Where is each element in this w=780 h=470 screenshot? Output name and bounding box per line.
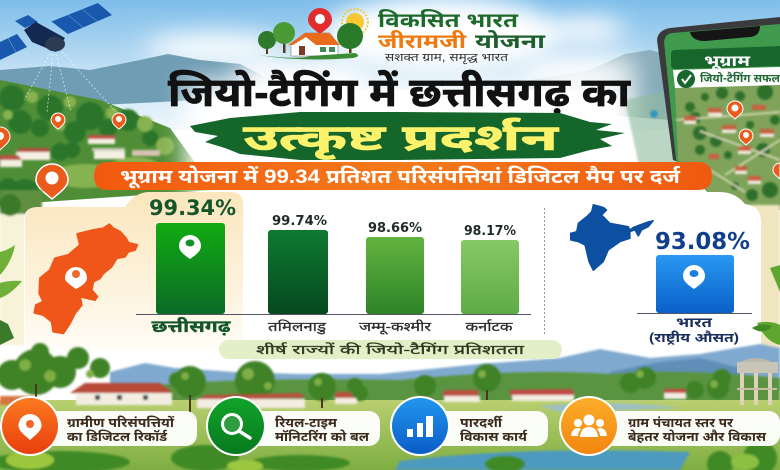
highlight panel behind Chhattisgarh — [25, 192, 243, 350]
left hillside with village — [0, 80, 215, 209]
foreground foliage — [0, 441, 777, 470]
bar: Chhattisgarh — [149, 196, 236, 336]
title line 2: उत्कृष्ट प्रदर्शन — [243, 117, 559, 161]
bottom landscape — [0, 343, 780, 470]
title line 1: जियो-टैगिंग में छत्तीसगढ़ का — [168, 69, 631, 115]
feature: real-time monitoring: मॉनिटरिंग को बल — [275, 429, 370, 444]
feature: real-time monitoring: रियल-टाइम — [275, 415, 338, 430]
bar: Karnataka — [461, 223, 519, 334]
phone map — [676, 84, 780, 201]
right leaves — [752, 265, 780, 345]
chart caption pill: शीर्ष राज्यों की जियो-टैगिंग प्रतिशतता — [256, 342, 525, 357]
mountains top right — [520, 50, 670, 120]
logo text: विकसित भारत — [378, 8, 519, 32]
bar: Tamil Nadu — [268, 213, 328, 335]
feature: transparent development: विकास कार्य — [460, 429, 528, 444]
main white panel — [24, 192, 761, 352]
chart caption pill — [219, 340, 562, 359]
phone with app screen: भूग्राम — [704, 53, 750, 71]
feature: transparent development — [390, 396, 548, 456]
bar: Chhattisgarh: 99.34% — [149, 196, 236, 220]
logo text: सशक्त ग्राम, समृद्ध भारत — [385, 52, 509, 64]
bar: Tamil Nadu: तमिलनाडु — [268, 319, 327, 335]
feature: digital record — [0, 396, 197, 456]
far mountains — [110, 344, 780, 390]
side backgrounds beside chart — [0, 190, 780, 350]
bar: Chhattisgarh: छत्तीसगढ़ — [152, 316, 231, 336]
feature: gram panchayat planning: ग्राम पंचायत स्तर पर — [628, 416, 734, 430]
satellite — [0, 3, 116, 112]
Chhattisgarh map — [34, 224, 137, 333]
logo text: जीरामजी — [378, 29, 467, 53]
pale valley beside phone — [625, 90, 685, 170]
water tower — [737, 358, 778, 405]
bar: Karnataka: कर्नाटक — [466, 319, 514, 334]
orange subtitle pill: भूग्राम योजना में 99.34 प्रतिशत परिसंपत्तियां डिजिटल मैप पर दर्ज — [120, 165, 681, 189]
bar: Jammu Kashmir — [359, 220, 432, 335]
left leaves — [0, 245, 22, 345]
white wash behind the title — [185, 56, 640, 197]
India map — [571, 205, 653, 270]
pond — [395, 450, 690, 470]
logo: house, trees, pin and sun — [258, 8, 368, 59]
phone with app screen — [657, 17, 780, 210]
map pins on hillside — [0, 113, 126, 199]
bar: Jammu Kashmir: जम्मू-कश्मीर — [359, 319, 432, 335]
village houses — [0, 383, 686, 408]
logo text: योजना — [475, 29, 546, 53]
tree highlights — [19, 359, 718, 390]
feature: digital record: का डिजिटल रिकॉर्ड — [67, 429, 168, 444]
bar chart: top states — [136, 196, 531, 336]
feature: digital record: ग्रामीण परिसंपत्तियों — [67, 415, 175, 430]
sky background — [0, 0, 780, 130]
logo text — [378, 8, 546, 64]
bar: India national average: 93.08% — [655, 229, 750, 255]
bar: Karnataka: 98.17% — [464, 223, 516, 239]
left village houses — [0, 135, 160, 167]
bar: India national average — [637, 229, 752, 345]
feature: real-time monitoring — [206, 396, 380, 456]
mountains top left — [0, 54, 300, 110]
tree line behind — [100, 372, 780, 410]
solid white behind the title — [225, 90, 615, 195]
clouds — [145, 0, 625, 73]
bar: India national average: (राष्ट्रीय औसत) — [649, 330, 739, 345]
green brush banner — [190, 112, 625, 160]
feature: transparent development: पारदर्शी — [460, 415, 503, 430]
phone with app screen: जियो-टैगिंग सफल — [700, 71, 780, 85]
feature: gram panchayat planning — [559, 396, 780, 456]
bar: Jammu Kashmir: 98.66% — [368, 220, 422, 236]
big trees — [0, 343, 731, 401]
bar: India national average: भारत — [676, 315, 713, 330]
bar: Tamil Nadu: 99.74% — [272, 213, 327, 229]
meadow — [0, 400, 780, 470]
feature: gram panchayat planning: बेहतर योजना और विकास — [628, 429, 767, 444]
orange subtitle pill — [94, 162, 712, 190]
